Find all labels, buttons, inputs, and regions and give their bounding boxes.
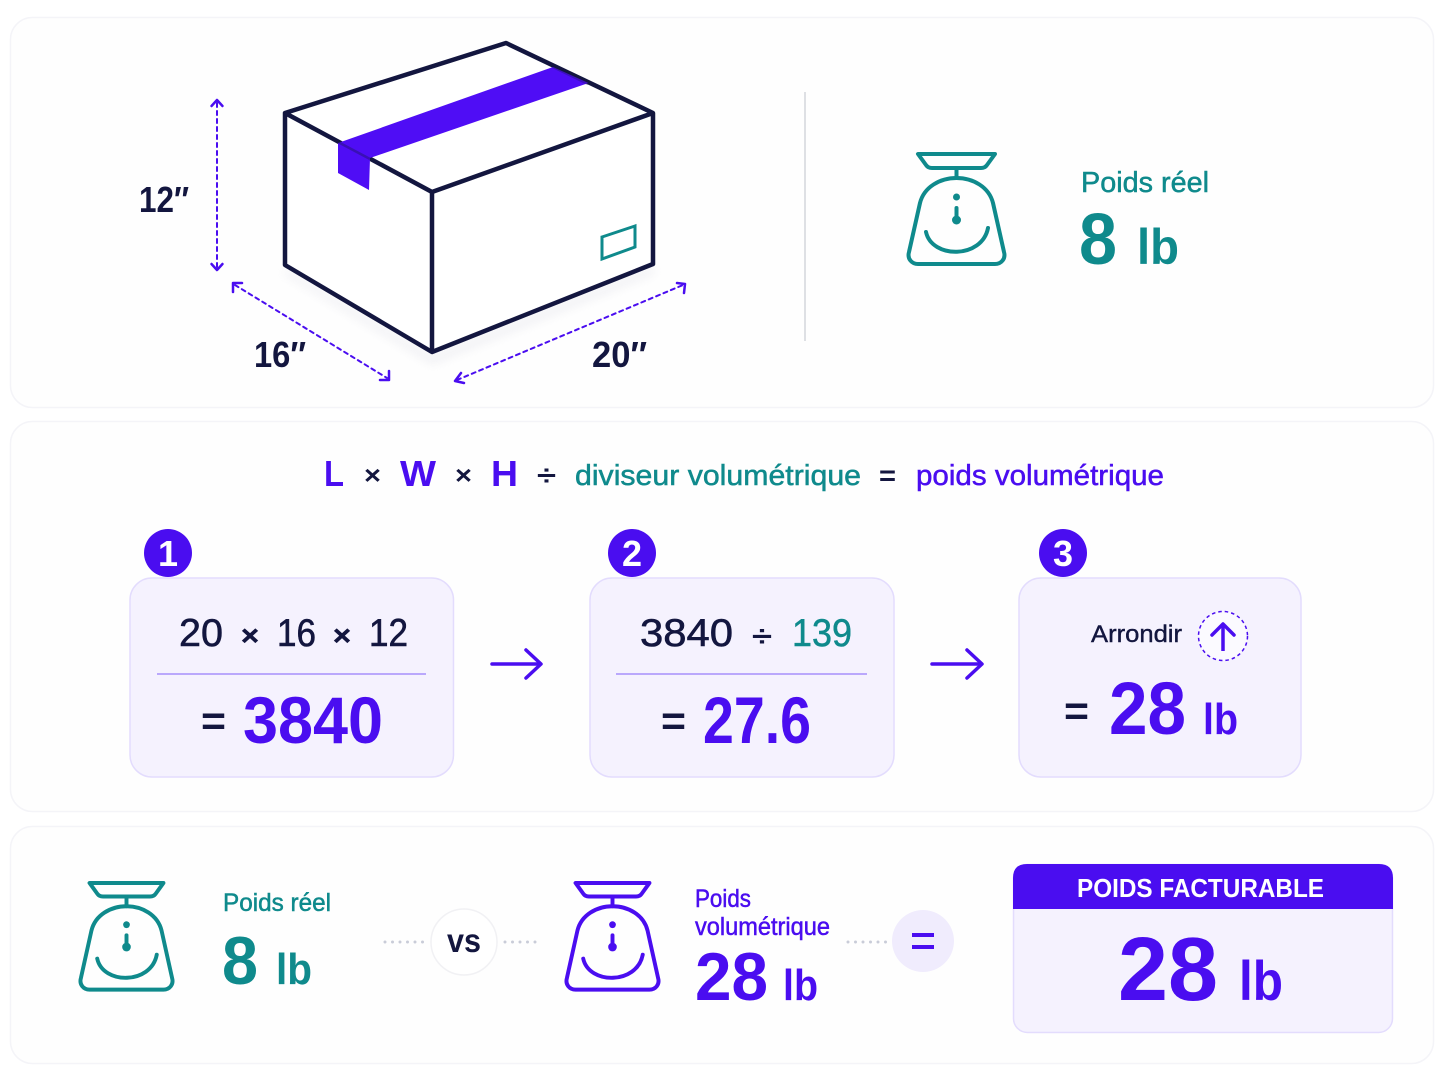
depth label: 16″ — [254, 334, 306, 375]
multiplication: × — [241, 620, 259, 651]
division: ÷ — [752, 621, 772, 653]
height dimension — [212, 100, 222, 270]
round up label: Arrondir — [1091, 621, 1182, 648]
actual weight value: lb — [276, 945, 312, 994]
result — [1064, 667, 1238, 750]
tape — [338, 67, 588, 190]
panel: comparison — [10, 826, 1434, 1064]
divider — [804, 92, 806, 341]
actual weight value: 8 — [1079, 200, 1117, 280]
volumetric weight value — [695, 939, 818, 1015]
icon: teal scale small — [80, 883, 173, 990]
volumetric weight label — [695, 885, 830, 941]
result: = — [201, 698, 226, 744]
step 2 badge: 2 — [622, 533, 642, 574]
dotted connector middle — [505, 940, 541, 944]
step 1 badge — [144, 529, 192, 577]
step 2 card — [590, 529, 894, 777]
division — [640, 612, 852, 655]
width label: 20″ — [592, 334, 647, 375]
multiplication: × — [333, 620, 351, 651]
formula: = — [879, 460, 896, 491]
multiplication — [179, 612, 408, 655]
shipping label — [602, 226, 635, 259]
result: 3840 — [243, 683, 383, 757]
depth dimension — [233, 283, 389, 380]
volumetric weight value: 28 — [695, 939, 768, 1015]
billable title: POIDS FACTURABLE — [1077, 873, 1324, 903]
vs badge: vs — [447, 922, 481, 959]
formula — [324, 453, 1164, 494]
icon: teal scale — [909, 154, 1004, 264]
actual weight value: 8 — [222, 923, 258, 999]
billable weight card — [1013, 864, 1393, 1032]
vs badge — [431, 909, 497, 975]
multiplication: 20 — [179, 612, 223, 655]
step 1 badge: 1 — [158, 533, 178, 574]
icon: purple scale — [566, 883, 659, 990]
step 1 card — [130, 529, 454, 777]
step 2 badge — [608, 529, 656, 577]
panel: box and actual weight — [10, 18, 1434, 408]
formula: × — [455, 460, 472, 490]
billable value: 28 — [1118, 920, 1218, 1020]
result: lb — [1203, 695, 1238, 744]
result: 28 — [1109, 667, 1186, 750]
volumetric weight value: lb — [783, 961, 818, 1010]
result: = — [1064, 688, 1089, 734]
volumetric weight label: volumétrique — [695, 913, 830, 941]
billable value: lb — [1239, 949, 1283, 1012]
actual weight label: Poids réel — [223, 889, 331, 917]
arrow 2 — [932, 650, 982, 678]
formula: ÷ — [537, 460, 556, 491]
formula: × — [364, 460, 381, 490]
result: 27.6 — [703, 683, 811, 757]
height label: 12″ — [139, 179, 189, 220]
formula: diviseur volumétrique — [575, 460, 861, 492]
dotted connector left — [385, 940, 427, 944]
icon: round up arrow — [1198, 612, 1248, 660]
formula: L — [324, 453, 344, 494]
step 3 badge — [1039, 529, 1087, 577]
dotted connector right — [848, 940, 886, 944]
result — [661, 683, 811, 757]
formula: W — [400, 453, 436, 494]
multiplication: 16 — [277, 612, 316, 655]
division: 3840 — [640, 612, 733, 655]
actual weight label: Poids réel — [1081, 167, 1209, 199]
actual weight value — [222, 923, 312, 999]
result: = — [661, 698, 686, 744]
step 3 badge: 3 — [1053, 533, 1073, 574]
box illustration — [285, 43, 655, 364]
equals badge — [892, 910, 954, 972]
volumetric weight label: Poids — [695, 885, 751, 913]
step 3 card — [1019, 529, 1301, 777]
actual weight value — [1079, 200, 1179, 280]
division: 139 — [792, 612, 852, 655]
billable value — [1118, 920, 1283, 1020]
billable header — [1013, 864, 1393, 909]
arrow 1 — [492, 650, 541, 678]
actual weight value: lb — [1137, 219, 1179, 275]
panel: calculation — [10, 422, 1434, 812]
multiplication: 12 — [369, 612, 408, 655]
formula: H — [491, 453, 518, 494]
width dimension — [455, 283, 685, 383]
formula: poids volumétrique — [916, 460, 1164, 492]
